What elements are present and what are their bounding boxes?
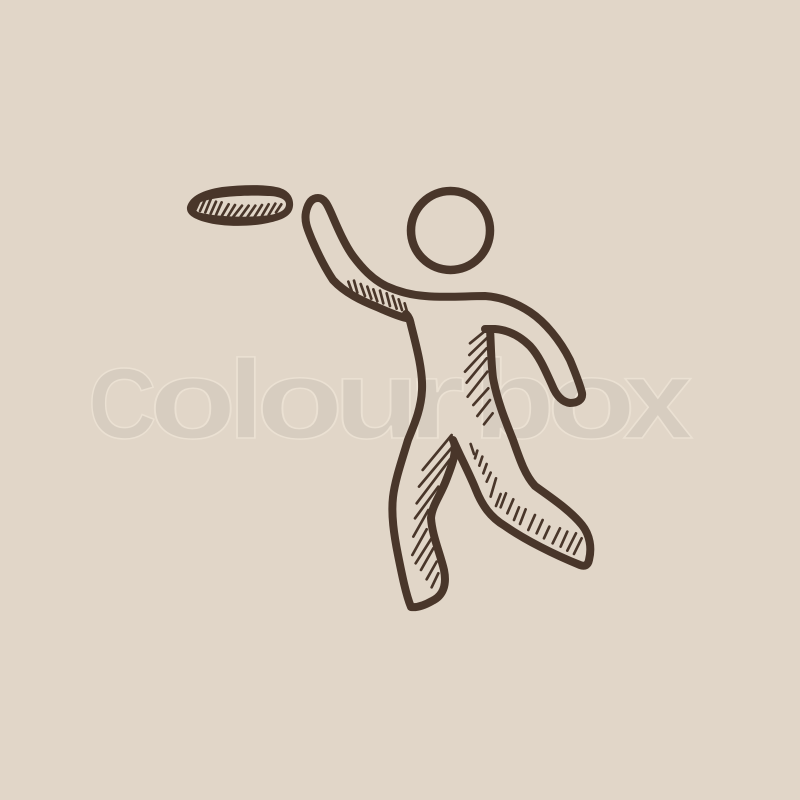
watermark: Colourbox: r	[407, 337, 465, 462]
figure: body outline	[305, 198, 590, 607]
watermark: Colourbox: u	[334, 337, 420, 462]
frisbee hatching	[196, 198, 281, 217]
watermark: Colourbox: o	[149, 337, 236, 462]
watermark: Colourbox: C	[88, 348, 157, 460]
watermark: Colourbox: l	[228, 337, 264, 462]
watermark: Colourbox: o	[547, 337, 636, 462]
icon: head	[411, 191, 490, 270]
hatching: raised arm	[348, 281, 407, 313]
figure: shading hatches	[348, 281, 582, 587]
frisbee outline	[187, 185, 293, 226]
hatching: torso	[465, 328, 493, 424]
watermark: Colourbox: o	[256, 337, 343, 462]
watermark: Colourbox	[88, 337, 693, 462]
icon: frisbee	[187, 185, 293, 226]
watermark: Colourbox: b	[473, 337, 555, 462]
hatching: front leg	[412, 435, 454, 587]
watermark: Colourbox: x	[623, 337, 693, 462]
hatching: back leg	[471, 444, 582, 554]
